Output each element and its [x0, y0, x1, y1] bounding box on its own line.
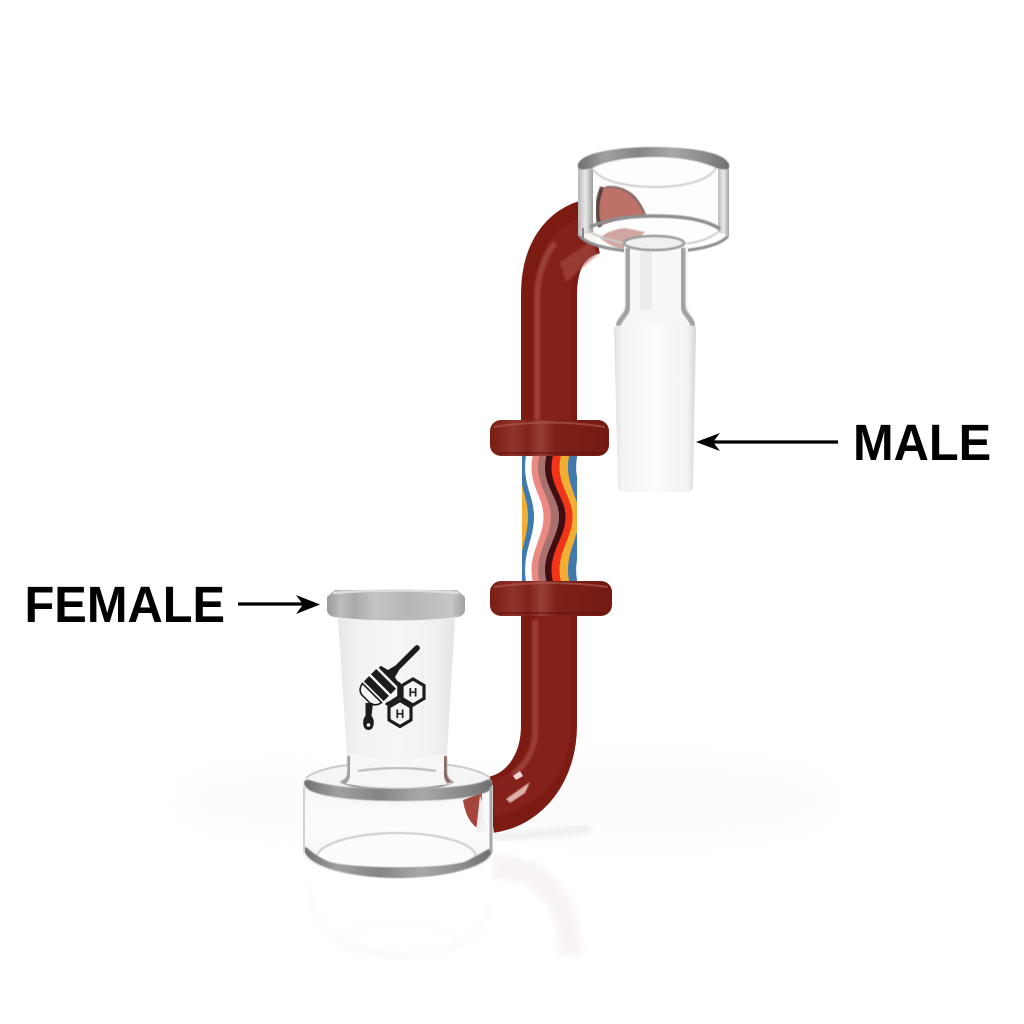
- logo: honey dipper and hexagons: [353, 634, 431, 730]
- hexagon behind dipper: [377, 677, 399, 704]
- male joint: [614, 236, 696, 492]
- male joint clear neck: [614, 244, 696, 330]
- dipper: [353, 634, 431, 712]
- bottom glass bucket: [303, 762, 493, 878]
- neck base ring: [342, 770, 452, 790]
- arrow: male: [696, 433, 838, 451]
- tube: lower bend: [490, 606, 549, 805]
- female joint frosted taper: [338, 618, 455, 758]
- hexagon H lower: H: [396, 707, 404, 721]
- arrow: female: [238, 595, 320, 614]
- female joint clear neck: [346, 752, 450, 787]
- bucket rim band: [304, 780, 492, 801]
- bucket top surface: [304, 762, 492, 804]
- bucket left wall: [578, 163, 593, 236]
- upper red disc: [490, 420, 609, 456]
- tube: lower bend core shading: [492, 606, 553, 798]
- honey drop: [363, 703, 374, 730]
- lower red disc: [490, 581, 612, 616]
- label: MALE: MALE: [853, 414, 991, 471]
- bucket base front: [580, 236, 728, 252]
- bucket right wall: [718, 163, 729, 236]
- female joint rim: [327, 590, 465, 620]
- label: FEMALE: FEMALE: [24, 576, 225, 633]
- bucket base band: [304, 847, 492, 878]
- hexagon H upper: H: [409, 685, 417, 699]
- inner lip line: [592, 168, 716, 187]
- bucket wall: [303, 785, 493, 878]
- male joint collar: [624, 236, 684, 250]
- red glass tube: [490, 226, 598, 805]
- tube: upper bend: [549, 226, 594, 430]
- reflection of the piece on the floor: [308, 867, 570, 956]
- wavy coloured centre section: [522, 456, 577, 581]
- tube: lower bend highlights: [513, 620, 535, 775]
- red seen through the wall: [463, 793, 482, 830]
- inner base ellipse: [316, 833, 476, 870]
- female joint: [327, 590, 465, 787]
- bucket rim back edge: [306, 762, 490, 778]
- bucket rim crescent: [578, 147, 729, 169]
- tube: upper bend core shading: [553, 232, 592, 430]
- tube: upper bend highlights: [537, 243, 555, 420]
- male joint frosted taper: [614, 323, 696, 492]
- bucket base band back edge: [590, 216, 720, 229]
- red seen through glass: [597, 187, 645, 226]
- bucket wall: [578, 148, 729, 252]
- floor shadow: [180, 760, 830, 840]
- top glass bucket: [578, 147, 729, 252]
- bucket sides: [303, 787, 305, 852]
